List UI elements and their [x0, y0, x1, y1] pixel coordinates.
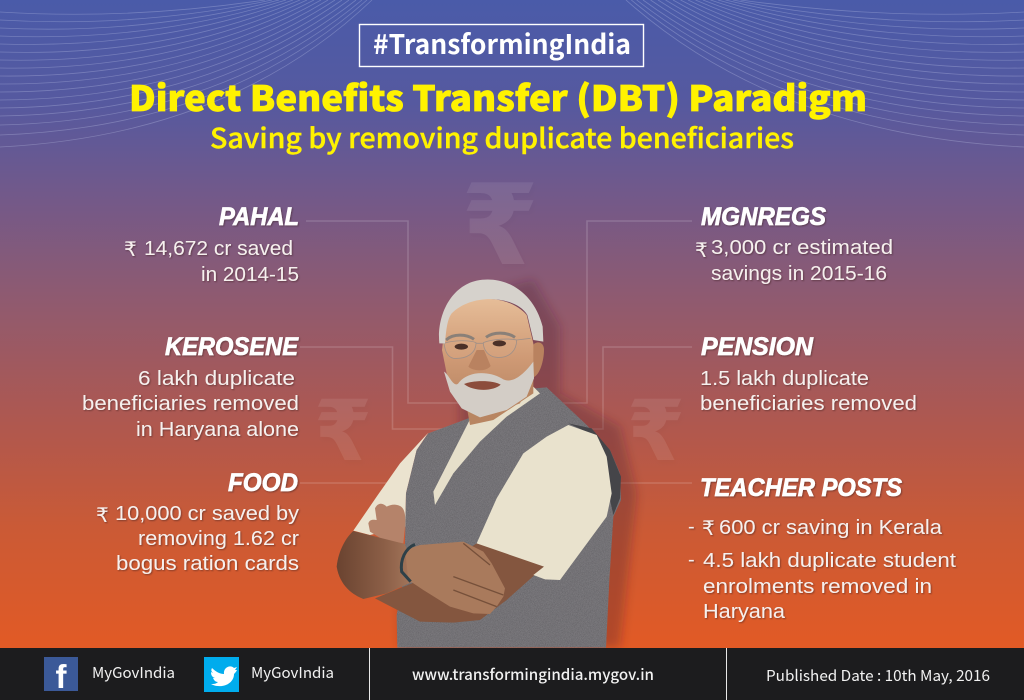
- panel: MGNREGS: MGNREGS: [701, 203, 826, 231]
- background rupee symbols: ₹: [627, 384, 685, 478]
- footer: [0, 648, 1024, 700]
- mouth: [464, 381, 501, 390]
- clasped hand: [405, 542, 505, 614]
- panel: MGNREGS: [695, 203, 893, 285]
- panel: PAHAL: PAHAL: [219, 203, 299, 231]
- panel: TEACHER POSTS: 600 cr saving in Kerala: [719, 517, 943, 539]
- facebook handle: MyGovIndia: [92, 662, 175, 683]
- icon: twitter: [204, 657, 239, 692]
- icon: facebook: [44, 657, 78, 695]
- wristband: [401, 544, 415, 582]
- hand finger creases: [453, 543, 503, 607]
- left sleeve: [353, 433, 428, 535]
- panel: TEACHER POSTS: -: [688, 516, 695, 538]
- background rupee symbols: ₹: [461, 163, 539, 288]
- website url: www.transformingindia.mygov.in: [412, 664, 654, 685]
- beard: [444, 362, 534, 417]
- panel: FOOD: removing 1.62 cr: [138, 528, 299, 550]
- decorative curved lines right: [626, 0, 1024, 147]
- panel: TEACHER POSTS: 4.5 lakh duplicate student: [703, 550, 956, 572]
- panel: MGNREGS: 3,000 cr estimated: [711, 237, 893, 259]
- panel: FOOD: 10,000 cr saved by: [115, 503, 299, 525]
- background rupee symbols: ₹: [314, 384, 372, 478]
- panel: TEACHER POSTS: Haryana: [703, 601, 786, 623]
- vest: [397, 387, 621, 648]
- panel: TEACHER POSTS: [688, 474, 956, 623]
- panel: PENSION: PENSION: [701, 333, 814, 361]
- right sleeve: [477, 425, 612, 580]
- panel: TEACHER POSTS: TEACHER POSTS: [700, 474, 902, 502]
- panel: TEACHER POSTS: enrolments removed in: [703, 576, 932, 598]
- panel: PAHAL: [124, 203, 299, 286]
- background connector lines: [300, 221, 692, 483]
- background rupee symbols: [314, 163, 685, 478]
- panel: TEACHER POSTS: ₹: [702, 518, 715, 540]
- eyes and brows: [446, 333, 515, 350]
- nose: [468, 350, 491, 370]
- panel: FOOD: bogus ration cards: [116, 553, 299, 575]
- shirt collar and placket: [433, 387, 540, 505]
- decorative curved lines left: [0, 0, 372, 147]
- hashtag badge: #TransformingIndia: [373, 23, 631, 62]
- icon: facebook: f: [56, 658, 68, 695]
- panel: FOOD: FOOD: [228, 469, 298, 497]
- vest dark armhole: [568, 423, 621, 515]
- subtitle: Saving by removing duplicate beneficiaries: [210, 117, 794, 156]
- panel: TEACHER POSTS: -: [688, 549, 695, 571]
- panel: FOOD: ₹: [96, 505, 109, 527]
- panel: KEROSENE: [82, 333, 299, 441]
- portrait shadow: [400, 280, 637, 648]
- panel: MGNREGS: savings in 2015-16: [711, 263, 887, 285]
- panel: KEROSENE: 6 lakh duplicate: [138, 368, 295, 390]
- panel: KEROSENE: beneficiaries removed: [82, 393, 299, 415]
- portrait of Narendra Modi: [337, 280, 637, 648]
- panel: PENSION: 1.5 lakh duplicate: [700, 368, 869, 390]
- upper forearm: [337, 531, 417, 599]
- panel: PENSION: [700, 333, 917, 415]
- panel: FOOD: [96, 469, 299, 575]
- lower forearm: [375, 543, 544, 623]
- panel: KEROSENE: in Haryana alone: [136, 419, 299, 441]
- panel: PAHAL: in 2014-15: [201, 264, 299, 286]
- panel: PAHAL: ₹: [124, 239, 137, 261]
- twitter handle: MyGovIndia: [251, 662, 334, 683]
- title: Direct Benefits Transfer (DBT) Paradigm: [129, 71, 867, 122]
- neck: [467, 367, 533, 425]
- panel: KEROSENE: KEROSENE: [165, 333, 299, 361]
- hair: [439, 280, 543, 343]
- panel: MGNREGS: ₹: [695, 240, 708, 262]
- glasses: [441, 338, 531, 358]
- panel: PAHAL: 14,672 cr saved: [144, 238, 293, 260]
- face: [442, 299, 533, 417]
- footer dividers: [370, 648, 726, 700]
- panel: PENSION: beneficiaries removed: [700, 393, 917, 415]
- ear: [532, 342, 544, 377]
- left hand fingers: [368, 504, 405, 543]
- published date: Published Date : 10th May, 2016: [766, 665, 990, 686]
